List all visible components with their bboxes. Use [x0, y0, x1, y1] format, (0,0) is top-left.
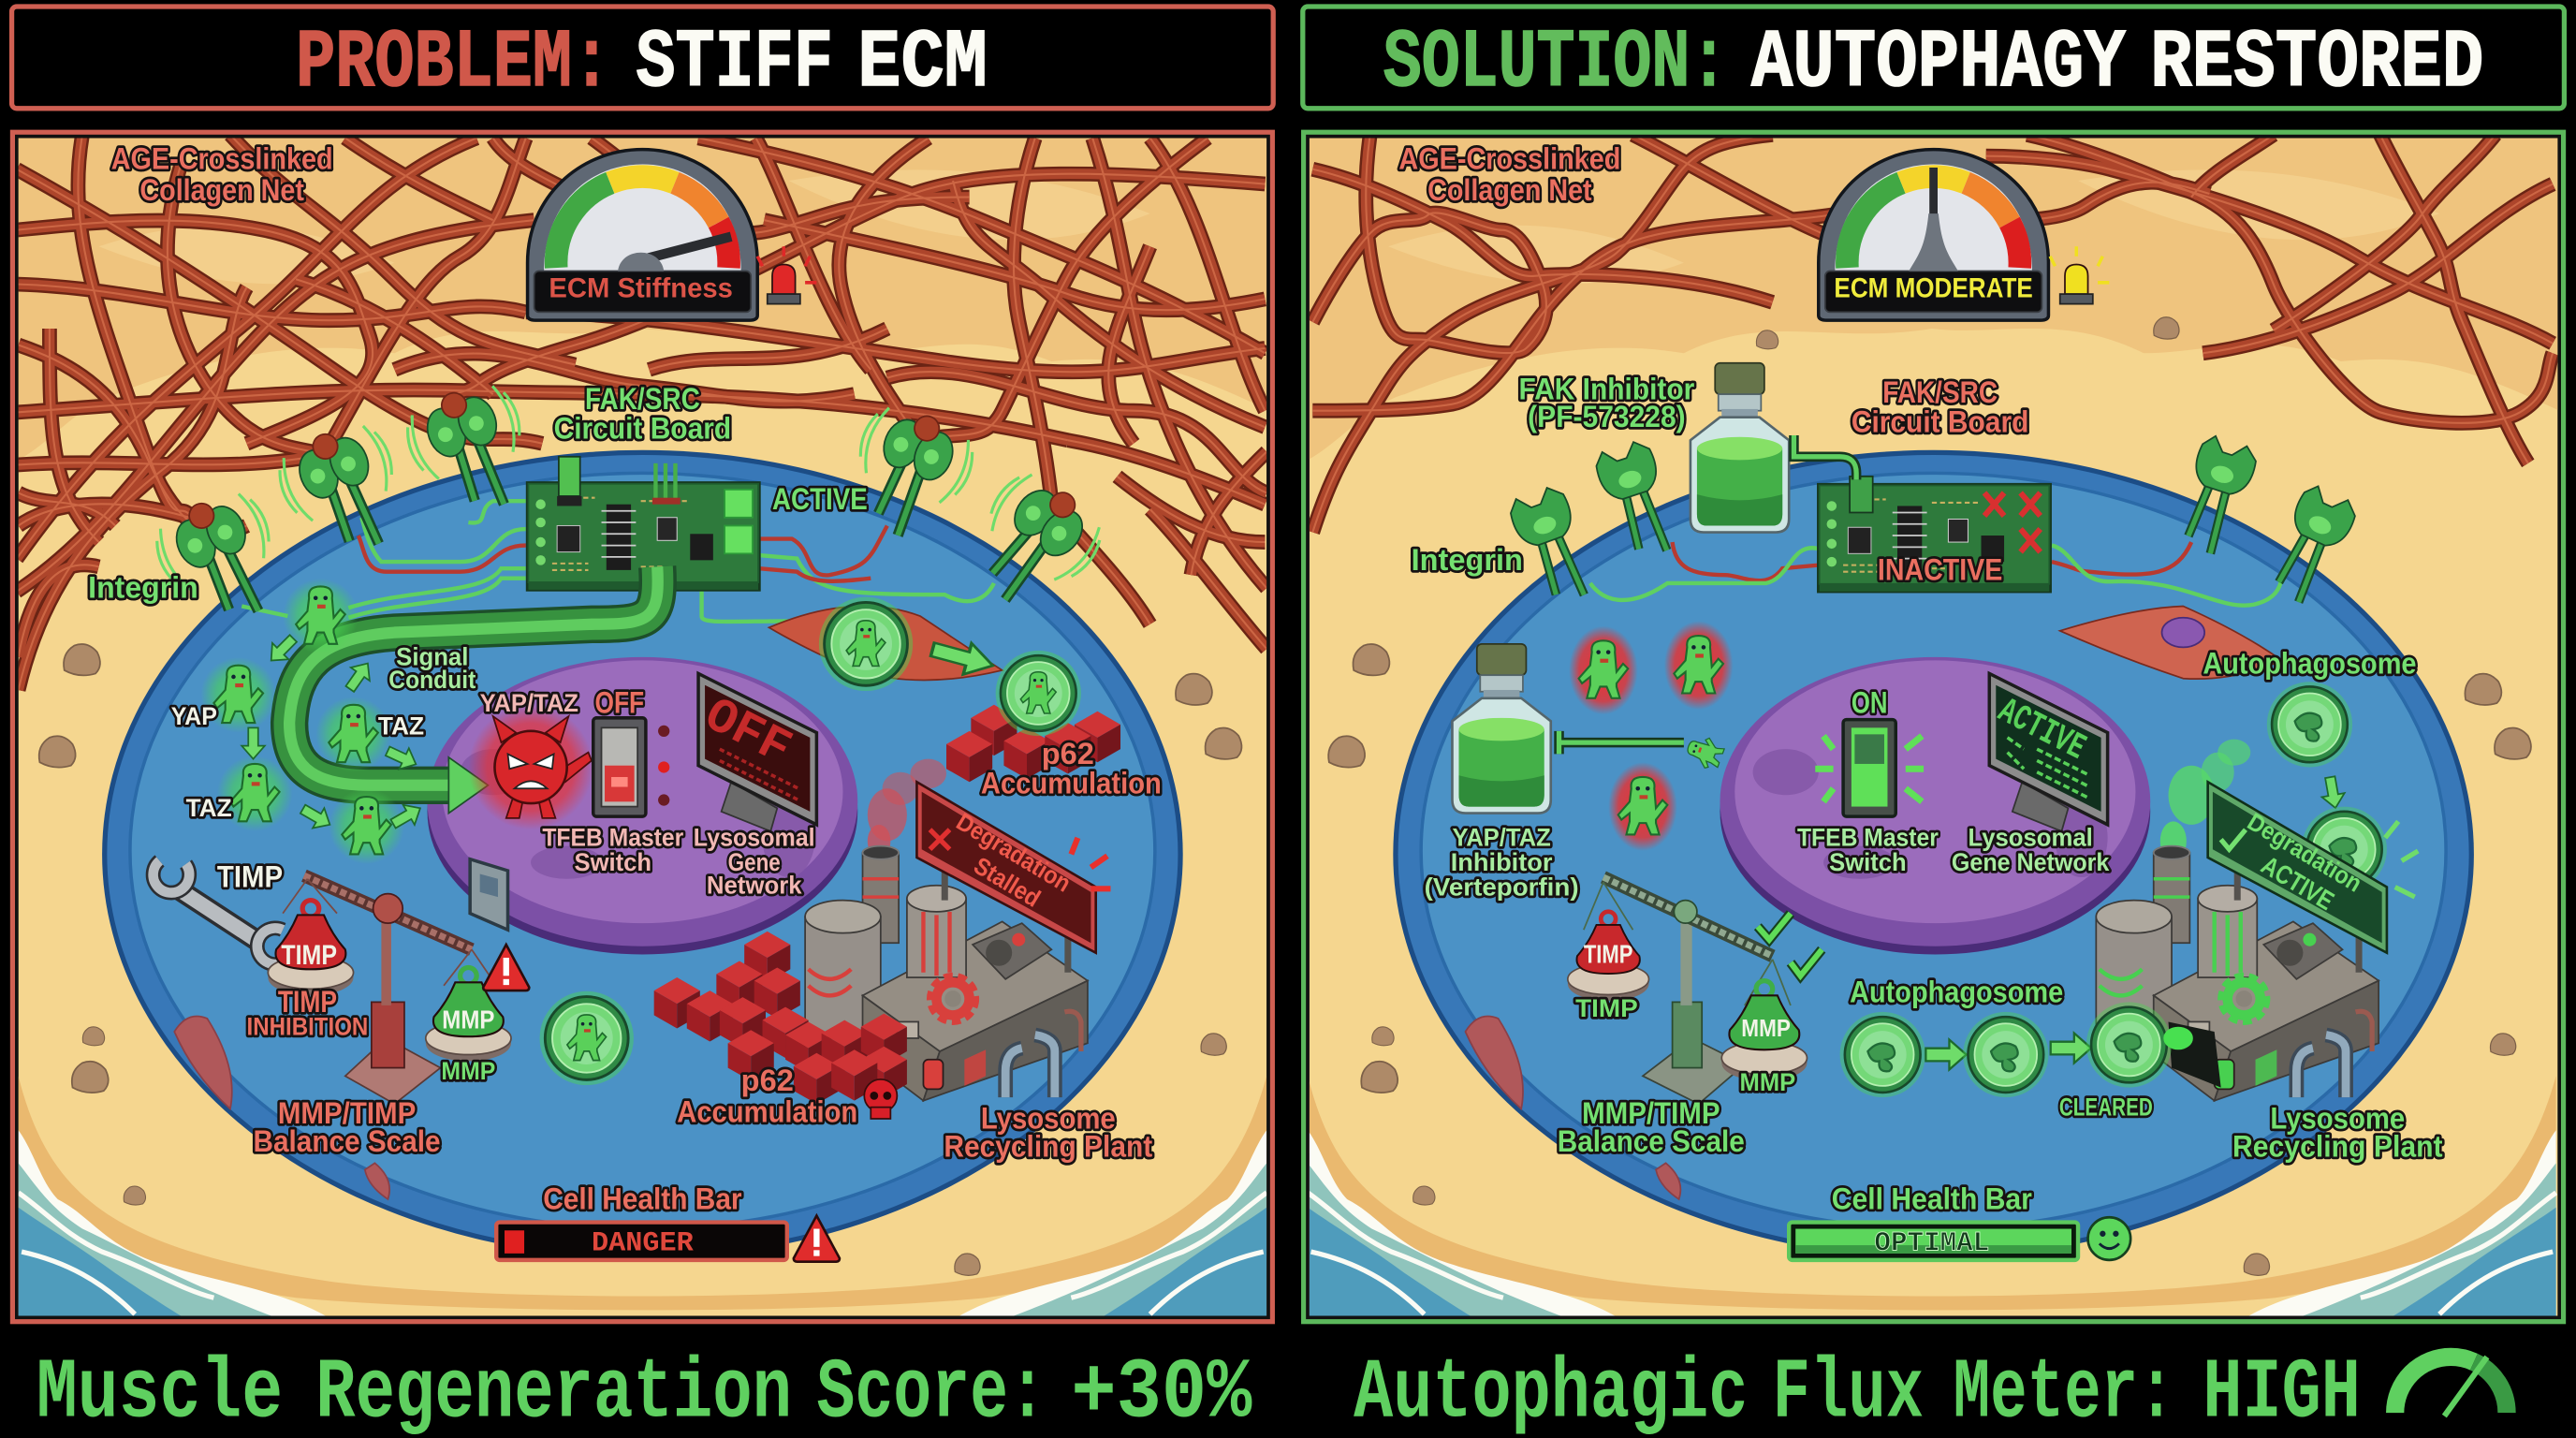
label: signal conduit: Conduit — [388, 665, 476, 694]
label: lysosomal gene network: Lysosomal — [1968, 823, 2093, 852]
cell health bar danger: DANGER — [592, 1226, 694, 1258]
FAK/SRC circuit board active — [526, 457, 761, 592]
label: FAK inhibitor: FAK Inhibitor — [1519, 372, 1695, 405]
label: FAK inhibitor: (PF-573228) — [1528, 400, 1686, 433]
monitor: gene network active — [1989, 673, 2108, 831]
TFEB master switch on — [1815, 720, 1924, 816]
MMP/TIMP balance scale balanced: TIMP — [1584, 939, 1632, 968]
wires — [1590, 542, 2282, 606]
footer: autophagic flux meter — [1354, 1346, 2361, 1438]
sign: degradation active: ACTIVE — [2257, 850, 2339, 916]
autophagosome capsules stalled — [819, 597, 997, 691]
cell health bar danger — [496, 1223, 787, 1260]
label: balance scale: MMP/TIMP — [1582, 1096, 1720, 1130]
cell health bar optimal: OPTIMAL — [1874, 1226, 1989, 1258]
header: problem: ECM — [857, 18, 988, 110]
label: lysosome plant: Lysosome — [981, 1101, 1116, 1135]
header: solution: SOLUTION: — [1383, 18, 1728, 110]
label: circuit board: FAK/SRC — [1882, 375, 1998, 409]
label: TIMP inhibition: INHIBITION — [247, 1011, 368, 1040]
label: TFEB switch: Switch — [1829, 847, 1907, 876]
label: collagen net: AGE-Crosslinked — [1398, 142, 1620, 176]
label: TIMP: TIMP — [217, 860, 283, 894]
header: problem — [12, 7, 1273, 110]
label: TFEB switch — [1797, 823, 1939, 876]
label: p62 accumulation lower: p62 — [741, 1064, 794, 1097]
label: p62 accumulation lower — [677, 1064, 857, 1128]
label: TAZ left: TAZ — [186, 793, 232, 822]
text: p62 accumulation upper: p62 — [1042, 737, 1094, 770]
gauge: ECM moderate — [1819, 150, 2048, 320]
label: p62 accumulation lower: Accumulation — [677, 1094, 857, 1128]
text: p62 accumulation upper — [981, 737, 1162, 800]
monitor: gene network active: ACTIVE — [1991, 691, 2092, 769]
sign: degradation active: Degradation — [2243, 807, 2367, 898]
icon: red siren — [757, 246, 816, 304]
header: solution: AUTOPHAGY — [1751, 18, 2126, 110]
icon: check marks — [1758, 914, 1822, 976]
MMP/TIMP balance scale tilted — [268, 875, 511, 1104]
icon: flux meter gauge — [2395, 1357, 2507, 1416]
label: collagen net — [111, 142, 333, 207]
label: lysosome plant: Recycling Plant — [2232, 1129, 2443, 1163]
label: collagen net: AGE-Crosslinked — [111, 142, 333, 176]
icon: smiley — [2088, 1217, 2130, 1260]
capsule free — [540, 991, 634, 1085]
icon: wrench — [154, 860, 283, 964]
red inhibited YAP proteins — [1569, 621, 1734, 851]
monitor: gene network off — [695, 673, 816, 831]
label: collagen net: Collagen Net — [139, 173, 304, 207]
label: TIMP inhibition — [247, 985, 368, 1040]
label: collagen net — [1398, 142, 1620, 207]
label: TFEB switch — [542, 823, 684, 876]
panel: problem stiff ECM — [12, 132, 1272, 1322]
collagen net dense — [17, 135, 1266, 690]
MMP/TIMP balance scale balanced — [1568, 877, 1807, 1104]
label: collagen net: Collagen Net — [1427, 173, 1592, 207]
sign: degradation stalled — [916, 782, 1110, 973]
label: TIMP inhibition: TIMP — [278, 985, 337, 1019]
label: autophagosome lower: Autophagosome — [1850, 975, 2063, 1008]
label: cleared: CLEARED — [2059, 1092, 2153, 1121]
p62 aggregate cubes lower — [654, 932, 907, 1104]
label: MMP: MMP — [1740, 1067, 1795, 1096]
label: lysosomal gene network — [694, 823, 815, 900]
header: problem: PROBLEM: — [296, 18, 611, 110]
header: problem: STIFF — [636, 18, 833, 110]
gauge: ECM stiffness — [528, 150, 757, 320]
label: lysosome plant: Recycling Plant — [944, 1129, 1152, 1163]
sign: degradation stalled: Stalled — [969, 851, 1046, 913]
angry YAP/TAZ in nucleus — [468, 705, 593, 829]
header: solution: RESTORED — [2150, 18, 2483, 110]
label: YAP/TAZ in nucleus: YAP/TAZ — [480, 688, 578, 717]
icon: warning scale — [483, 945, 529, 990]
label: cell health bar: Cell Health Bar — [543, 1181, 742, 1215]
FAK inhibitor bottle — [1690, 363, 1856, 533]
label: circuit board — [1852, 375, 2028, 438]
label: ON: ON — [1852, 686, 1887, 720]
MMP/TIMP balance scale tilted: TIMP — [281, 940, 337, 971]
label: integrin: Integrin — [1412, 543, 1523, 577]
label: lysosome plant — [944, 1101, 1152, 1163]
upper p62 cubes — [946, 651, 1120, 782]
YAP/TAZ proteins glowing — [200, 579, 404, 864]
label: TFEB switch: TFEB Master — [542, 823, 684, 852]
label: YAP/TAZ inhibitor: Inhibitor — [1451, 847, 1553, 876]
label: autophagosome upper: Autophagosome — [2203, 646, 2416, 680]
integrins inactive — [1506, 433, 2361, 609]
label: YAP/TAZ inhibitor: YAP/TAZ — [1452, 823, 1551, 852]
lysosome recycling plant active — [2096, 740, 2378, 1101]
panel: solution autophagy restored — [1304, 132, 2564, 1322]
label: balance scale: MMP/TIMP — [278, 1096, 416, 1130]
label: YAP/TAZ inhibitor: (Verteporfin) — [1425, 872, 1579, 901]
label: lysosomal gene network: Gene — [728, 847, 781, 876]
label: balance scale: Balance Scale — [254, 1124, 441, 1158]
monitor: gene network off: OFF — [695, 687, 800, 777]
label: lysosomal gene network: Lysosomal — [694, 823, 815, 852]
muscle fiber healthy — [2060, 606, 2282, 679]
door — [470, 859, 508, 930]
lysosome recycling plant stalled — [805, 759, 1088, 1101]
MMP/TIMP balance scale balanced: MMP — [1741, 1014, 1791, 1042]
label: YAP: YAP — [171, 701, 217, 730]
label: lysosome plant: Lysosome — [2270, 1101, 2405, 1135]
label: lysosome plant — [2232, 1101, 2443, 1163]
label: circuit board: Circuit Board — [1852, 404, 2028, 438]
YAP/TAZ inhibitor bottle — [1452, 644, 1551, 814]
muscle fiber — [769, 606, 1003, 680]
label: circuit board: Circuit Board — [554, 412, 731, 446]
label: YAP/TAZ inhibitor — [1425, 823, 1579, 901]
icon: skull — [864, 1079, 897, 1119]
text: p62 accumulation upper: Accumulation — [981, 767, 1162, 800]
integrins active — [155, 385, 1101, 614]
small flow arrows — [242, 630, 426, 835]
signal conduit tube — [289, 566, 658, 814]
label: lysosomal gene network: Gene Network — [1952, 847, 2110, 876]
TFEB master switch off — [593, 718, 669, 816]
label: balance scale: Balance Scale — [1558, 1124, 1745, 1158]
label: balance scale — [254, 1096, 441, 1158]
label: TFEB switch: Switch — [575, 847, 651, 876]
sign: degradation stalled: Degradation — [952, 807, 1076, 898]
label: integrin: Integrin — [88, 571, 198, 605]
label: TIMP: TIMP — [1575, 993, 1638, 1022]
cell health bar optimal — [1789, 1223, 2078, 1260]
label: active: ACTIVE — [772, 482, 868, 516]
label: lysosomal gene network — [1952, 823, 2110, 876]
label: OFF: OFF — [595, 686, 644, 720]
gauge: ECM moderate: ECM MODERATE — [1834, 273, 2033, 304]
signal wires — [242, 501, 994, 622]
FAK/SRC circuit board inactive — [1817, 477, 2052, 593]
label: TAZ right: TAZ — [378, 711, 424, 740]
inhibition line — [1559, 731, 1726, 772]
label: cell health bar: Cell Health Bar — [1832, 1181, 2032, 1215]
MMP/TIMP balance scale tilted: MMP — [442, 1005, 494, 1034]
icon: yellow siren — [2050, 246, 2109, 304]
label: inactive: INACTIVE — [1878, 552, 2002, 586]
label: lysosomal gene network: Network — [707, 871, 802, 900]
sign: degradation active — [2208, 782, 2387, 973]
collagen net sparse — [1312, 135, 2553, 533]
label: MMP: MMP — [441, 1056, 495, 1085]
icon: warning danger — [794, 1215, 840, 1262]
header: solution — [1303, 7, 2564, 110]
gauge: ECM stiffness: ECM Stiffness — [549, 273, 733, 304]
autophagosome chain — [1840, 1002, 2193, 1097]
label: circuit board: FAK/SRC — [585, 382, 700, 416]
label: TFEB switch: TFEB Master — [1797, 823, 1939, 852]
label: signal conduit: Signal — [396, 642, 468, 671]
footer: muscle regeneration score — [37, 1346, 1252, 1438]
label: circuit board — [554, 382, 731, 446]
label: FAK inhibitor — [1519, 372, 1695, 433]
autophagosome pathway upper — [2267, 682, 2418, 897]
label: signal conduit — [388, 642, 476, 694]
label: balance scale — [1558, 1096, 1745, 1158]
